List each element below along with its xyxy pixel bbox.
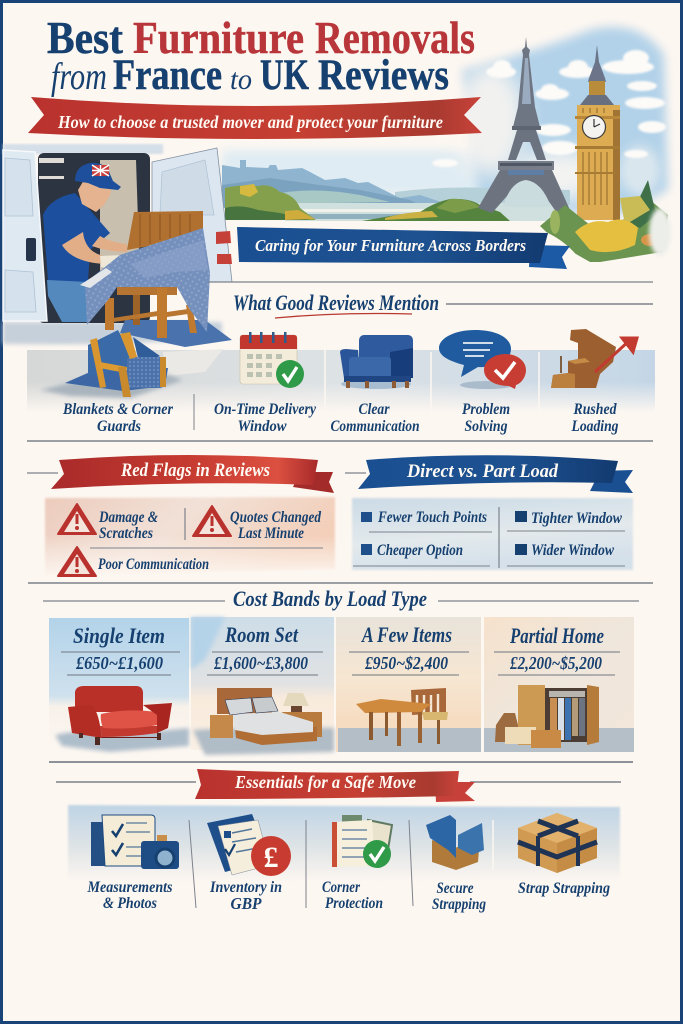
illustration: sky with clouds xyxy=(222,27,668,215)
flag: Quotes Changed Last Minute: Quotes Changed xyxy=(230,509,321,526)
icon: calendar with check xyxy=(240,332,304,388)
icon: speech bubbles with check xyxy=(439,330,526,389)
icon: strapped cardboard box xyxy=(518,813,597,873)
flag: Quotes Changed Last Minute: Last Minute xyxy=(237,525,304,542)
label: Secure Strapping: Secure xyxy=(436,880,474,897)
illustration: Eiffel Tower xyxy=(478,37,570,213)
flag: Damage & Scratches: Damage & xyxy=(98,509,158,526)
card: A Few Items: £950~$2,400 xyxy=(364,653,448,673)
option: Cheaper Option: Cheaper Option xyxy=(377,542,463,559)
card: Room Set: Room Set xyxy=(224,622,299,647)
ribbon: Caring for Your Furniture Across Borders: Caring for Your Furniture Across Borders xyxy=(255,236,526,255)
panel wash xyxy=(352,498,633,570)
card: Partial Home: Partial Home xyxy=(509,623,604,648)
card: A Few Items: A Few Items xyxy=(360,622,452,647)
title: Furniture xyxy=(133,12,304,63)
card wash xyxy=(49,618,189,748)
ribbon: Caring for Your Furniture Across Borders xyxy=(237,227,570,269)
panel wash background xyxy=(27,350,655,412)
title: Removals xyxy=(315,12,475,63)
panel: red flags xyxy=(43,497,339,579)
illustration: wooden chair being wrapped in blanket xyxy=(80,211,210,338)
label: On-Time Delivery Window: On-Time Delivery xyxy=(214,401,317,418)
icon: wardrobe with boxes xyxy=(495,685,599,748)
flag: Damage & Scratches: Scratches xyxy=(99,525,153,542)
flag: Quotes Changed Last Minute xyxy=(230,509,321,542)
label: Problem Solving xyxy=(461,401,510,435)
label: Secure Strapping: Strapping xyxy=(432,896,486,913)
panel wash xyxy=(68,805,620,882)
label: Strap Strapping: Strap Strapping xyxy=(518,880,610,897)
label: Blankets & Corner Guards: Blankets & Corner xyxy=(62,401,174,418)
label: Inventory in GBP xyxy=(209,879,282,913)
panel: direct vs part load xyxy=(352,498,633,570)
heading: Cost Bands by Load Type: Cost Bands by Load Type xyxy=(233,586,427,611)
illustration: white backing panel behind caption ribbon xyxy=(229,222,590,281)
icon: blue armchair xyxy=(340,335,413,389)
ribbon: Essentials for a Safe Move xyxy=(56,769,621,802)
option: Wider Window: Wider Window xyxy=(531,542,615,559)
label: On-Time Delivery Window xyxy=(214,401,317,435)
label: Problem Solving: Solving xyxy=(464,418,508,435)
option: Fewer Touch Points: Fewer Touch Points xyxy=(377,509,487,526)
card wash xyxy=(191,617,334,750)
label: Corner Protection: Protection xyxy=(325,895,383,912)
title: to xyxy=(230,63,252,96)
heading: What Good Reviews Mention: What Good Reviews Mention xyxy=(233,290,439,315)
icon: bed with nightstands and lamp xyxy=(210,688,322,745)
label: Inventory in GBP: GBP xyxy=(230,894,262,913)
label: Rushed Loading xyxy=(571,401,618,435)
card: Single Item: £650~£1,600 xyxy=(75,653,163,673)
panel wash xyxy=(45,497,335,576)
label: Measurements & Photos xyxy=(87,879,172,912)
flag: Damage & Scratches xyxy=(98,509,158,542)
label: Clear Communication: Clear xyxy=(358,401,390,418)
icon: stairs with rising arrow xyxy=(551,329,637,388)
title: Best xyxy=(47,12,124,63)
card: Partial Home: £2,200~$5,200 xyxy=(509,653,602,673)
icon: warning triangle xyxy=(58,547,96,576)
label: Measurements & Photos: Measurements xyxy=(87,879,172,896)
label: Blankets & Corner Guards xyxy=(62,401,174,435)
option: Tighter Window: Tighter Window xyxy=(531,510,623,527)
icon: blue corner guards on box xyxy=(426,815,484,870)
ribbon: Direct vs. Part Load xyxy=(345,455,633,493)
label: On-Time Delivery Window: Window xyxy=(238,418,287,435)
label: Corner Protection xyxy=(322,879,383,912)
label: Blankets & Corner Guards: Guards xyxy=(97,418,141,435)
card: Partial Home xyxy=(484,617,634,752)
label: Corner Protection: Corner xyxy=(322,879,361,896)
ribbon: Red Flags in Reviews: Red Flags in Reviews xyxy=(120,460,270,481)
label: Secure Strapping xyxy=(432,880,486,913)
title: UK xyxy=(260,52,309,99)
card: Room Set: £1,600~£3,800 xyxy=(213,653,308,673)
icon: warning triangle xyxy=(193,506,231,536)
label: Problem Solving: Problem xyxy=(461,401,510,418)
icon: blanket wrapped armchair xyxy=(40,330,183,398)
card wash xyxy=(484,617,634,750)
label: Inventory in GBP: Inventory in xyxy=(209,879,282,896)
label: Clear Communication: Communication xyxy=(330,418,420,435)
title: from xyxy=(51,56,107,98)
label: Clear Communication xyxy=(330,401,420,435)
illustration: mover worker xyxy=(43,163,133,322)
card: Single Item xyxy=(49,618,189,752)
card: A Few Items xyxy=(336,617,481,752)
icon: warning triangle xyxy=(58,504,96,534)
ribbon: Essentials for a Safe Move: Essentials for a Safe Move xyxy=(234,772,416,792)
ribbon: subtitle xyxy=(28,97,482,139)
heading: What Good Reviews Mention xyxy=(208,282,653,318)
card wash xyxy=(336,617,481,752)
illustration: foreground trees xyxy=(540,180,671,262)
flag: Poor Communication: Poor Communication xyxy=(98,556,209,573)
illustration: landscape with hills, river and trees xyxy=(222,160,570,221)
ribbon: Direct vs. Part Load: Direct vs. Part Load xyxy=(406,461,558,482)
icon: red armchair sofa xyxy=(68,686,172,745)
label: Rushed Loading: Rushed xyxy=(573,401,617,418)
ribbon: subtitle: How to choose a trusted mover and protect your furniture xyxy=(57,112,443,132)
icon: dining table and chair xyxy=(356,688,448,746)
card: Room Set xyxy=(191,617,334,755)
title xyxy=(47,12,475,99)
icon: inventory list with pound coin: £ xyxy=(264,841,278,874)
title: France xyxy=(113,52,222,99)
title: Reviews xyxy=(318,52,449,99)
ribbon: Red Flags in Reviews xyxy=(27,455,334,493)
card: Single Item: Single Item xyxy=(73,623,165,648)
icon: checklist and camera xyxy=(91,815,179,869)
icon: inventory list with pound coin xyxy=(207,814,291,876)
icon: documents with green check xyxy=(332,815,392,868)
illustration: floor rug under chair xyxy=(120,320,232,347)
label: Measurements & Photos: & Photos xyxy=(103,895,157,912)
illustration: delivery van xyxy=(3,144,232,344)
panel: good review criteria xyxy=(27,329,655,435)
divider set xyxy=(193,394,195,430)
illustration: Big Ben clock tower xyxy=(575,45,620,220)
label: Rushed Loading: Loading xyxy=(571,418,618,435)
panel: essentials for a safe move xyxy=(68,805,620,913)
